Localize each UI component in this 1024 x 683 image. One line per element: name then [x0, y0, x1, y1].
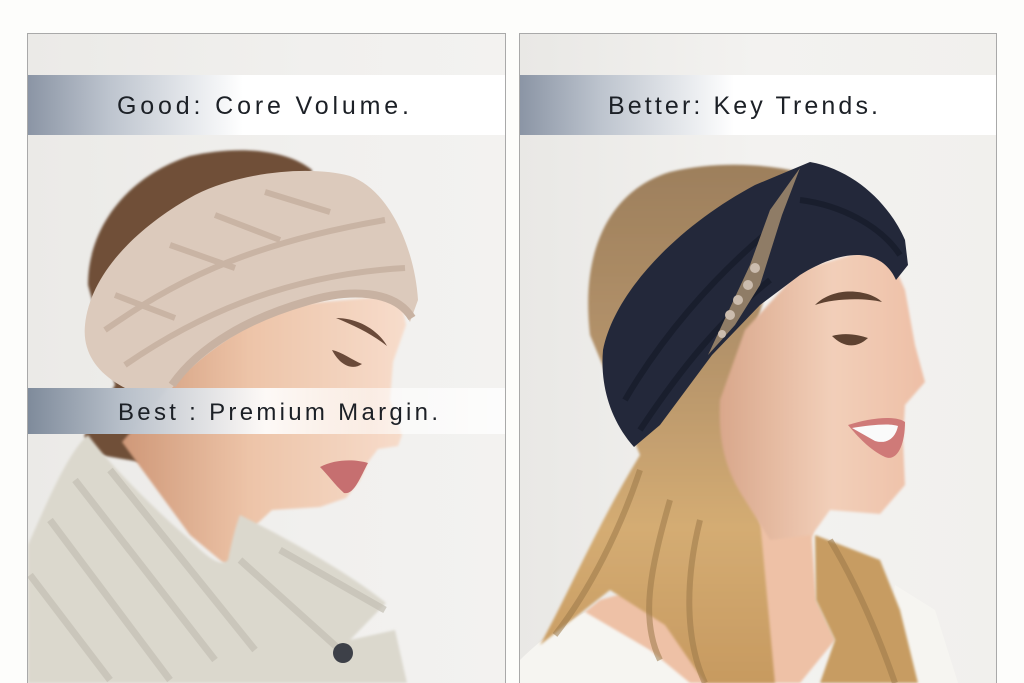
eyebrow and eye [332, 318, 387, 367]
hair [84, 150, 312, 462]
sweater ribs [30, 470, 385, 680]
knit folds [625, 200, 900, 430]
title bar: better [520, 75, 996, 135]
right side hair [815, 535, 918, 683]
sweater button [333, 643, 353, 663]
face [720, 245, 925, 540]
panel background [520, 34, 996, 683]
knit ribbed edge [172, 294, 412, 385]
panel border right [520, 34, 996, 683]
pearl beads [718, 263, 760, 338]
title bar: best [28, 388, 505, 434]
grey turtleneck sweater [28, 435, 407, 683]
navy knit headband [602, 162, 908, 447]
panel border left [28, 34, 506, 683]
panel background [28, 34, 505, 683]
eyebrow and eye [815, 291, 882, 345]
back hair [540, 165, 800, 683]
illustration: woman in beige headband [28, 150, 418, 683]
smile [848, 418, 905, 458]
beige knit headband [85, 171, 418, 388]
hair strands [555, 470, 895, 683]
heading: better: Better: Key Trends. [608, 92, 878, 120]
heading: good: Good: Core Volume. [117, 92, 409, 120]
panel: better tier [520, 34, 996, 683]
title bar: good [28, 75, 505, 135]
panel: good and best tiers [28, 34, 505, 683]
heading: best: Best : Premium Margin. [118, 399, 438, 426]
beaded trim [708, 168, 800, 355]
illustration: woman in navy headband [520, 162, 958, 683]
neck and chest [584, 523, 835, 683]
lips [320, 460, 368, 493]
white sweater [520, 613, 638, 683]
knit braid texture [105, 192, 405, 365]
neck and face [122, 295, 406, 570]
